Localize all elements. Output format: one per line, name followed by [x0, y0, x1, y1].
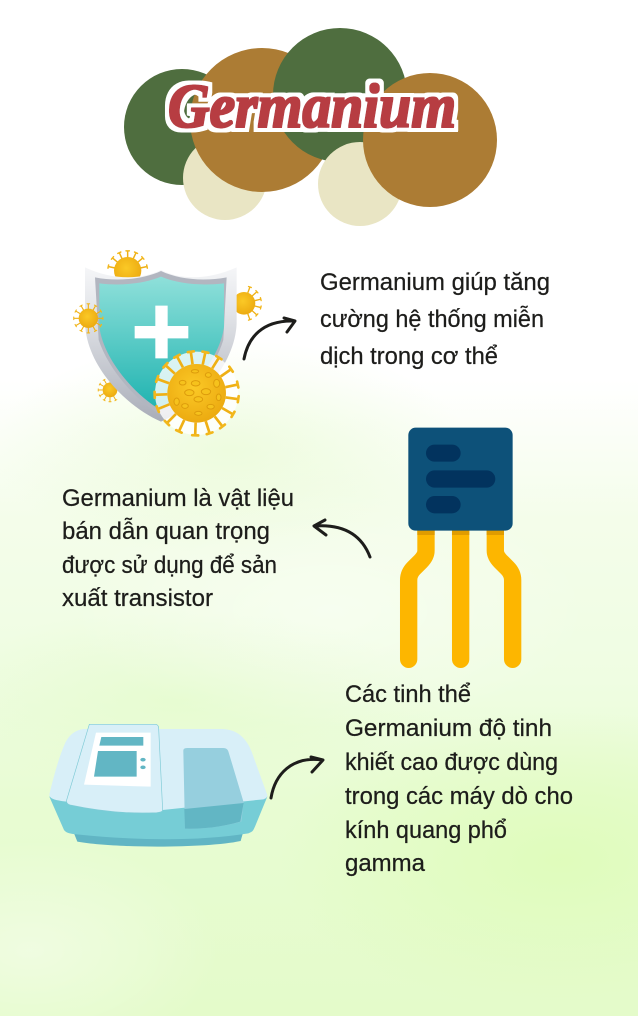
small virus right — [233, 287, 261, 320]
text block: gamma spectroscopy: khiết cao được dùng — [345, 749, 558, 776]
panel main display — [94, 751, 137, 777]
green circle left — [124, 69, 240, 185]
text block: semiconductor: Germanium là vật liệu — [62, 485, 294, 512]
text block: immune system: cường hệ thống miễn — [320, 306, 544, 333]
large virus — [155, 351, 239, 435]
left lead — [409, 528, 426, 659]
icon: transistor — [408, 428, 513, 659]
middle lead — [435, 528, 487, 659]
arrow: shield to text — [244, 318, 295, 359]
green circle top — [273, 28, 407, 162]
small virus lower left — [98, 378, 117, 402]
machine top — [49, 729, 267, 810]
cream circle left — [183, 136, 267, 220]
text block: gamma spectroscopy: kính quang phổ — [345, 817, 507, 844]
control panel — [66, 724, 163, 813]
text block: gamma spectroscopy: Các tinh thể — [345, 681, 471, 708]
text block: gamma spectroscopy: trong các máy dò cho — [345, 783, 573, 810]
text block: gamma spectroscopy: Germanium độ tinh — [345, 715, 552, 742]
text block: gamma spectroscopy — [345, 681, 573, 877]
right lead — [495, 528, 513, 659]
title text: Germanium — [168, 73, 456, 141]
text block: semiconductor: xuất transistor — [62, 585, 213, 612]
body marks — [426, 445, 495, 513]
panel upper display — [99, 737, 143, 746]
machine front — [49, 782, 267, 839]
panel buttons — [140, 758, 146, 769]
cream circle right — [318, 142, 402, 226]
brown circle left — [190, 48, 334, 192]
transistor body — [408, 428, 513, 531]
small virus top — [108, 251, 147, 284]
icon: gamma spectrometer — [49, 724, 267, 847]
white cross — [135, 306, 188, 358]
text block: gamma spectroscopy: gamma — [345, 850, 426, 877]
machine base — [73, 832, 243, 847]
icon: shield with viruses — [74, 251, 261, 435]
text block: semiconductor — [62, 485, 294, 612]
text block: immune system: dịch trong cơ thể — [320, 343, 498, 370]
brown circle right — [363, 73, 497, 207]
lead shadows — [417, 528, 504, 535]
title: Germanium over painted circles — [124, 28, 497, 226]
panel screen plate — [84, 733, 151, 787]
small virus left — [74, 304, 103, 333]
text block: semiconductor: được sử dụng để sản — [62, 552, 277, 579]
text block: immune system — [320, 269, 550, 370]
arrow: spectrometer to text — [271, 757, 323, 798]
window lid — [183, 748, 244, 829]
window lower shade — [184, 803, 244, 829]
shield rim — [85, 267, 237, 422]
text block: immune system: Germanium giúp tăng — [320, 269, 550, 296]
text block: semiconductor: bán dẫn quan trọng — [62, 518, 270, 545]
shield inner edge — [95, 271, 227, 415]
shield teal face — [99, 277, 224, 410]
arrow: transistor to text — [314, 520, 370, 557]
